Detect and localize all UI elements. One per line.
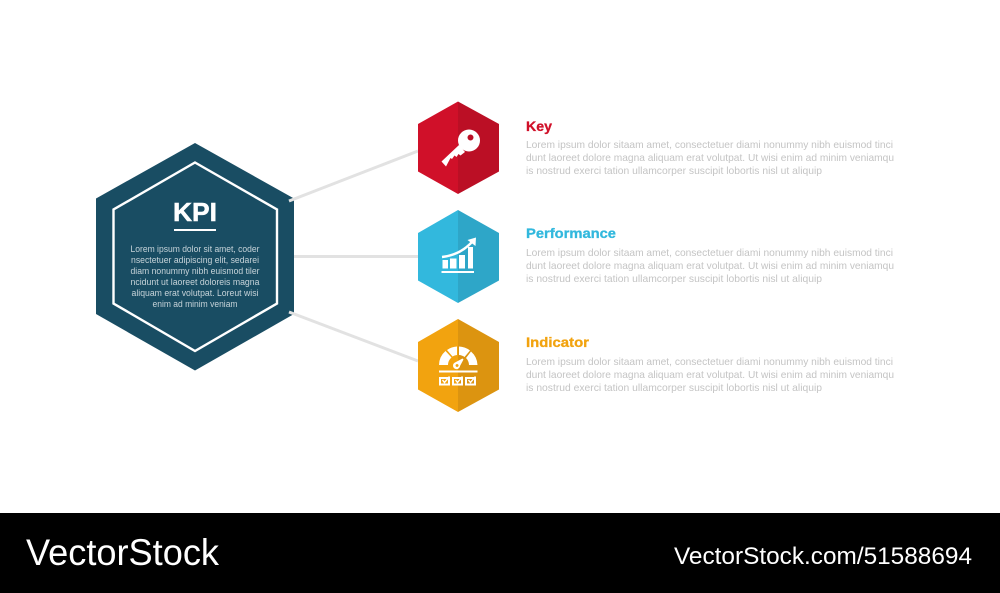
- KPI description text: aliquam erat volutpat. Loreut wisi: [132, 288, 259, 298]
- footer bar: [0, 513, 1000, 593]
- panel: KPI hexagon: [96, 143, 294, 370]
- text block: Performance: dunt laoreet dolore magna aliquam erat volutpat. Ut wisi enim ad minim veniamqu: [526, 260, 894, 272]
- text block: Indicator: is nostrud exerci tation ullamcorper suscipit lobortis nisl ut aliquip: [526, 382, 822, 394]
- text block: Key: [526, 118, 894, 177]
- brand name: VectorStock: [26, 532, 219, 573]
- icon: gauge with checkboxes: [439, 346, 478, 372]
- heading: KPI: KPI: [173, 197, 217, 227]
- text block: Key: dunt laoreet dolore magna aliquam erat volutpat. Ut wisi enim ad minim veniamqu: [526, 152, 894, 164]
- text block: Key: Lorem ipsum dolor sitaam amet, consectetuer diami nonummy nibh euismod tinci: [526, 139, 893, 151]
- icon hexagon: Performance: [418, 210, 499, 303]
- text block: Indicator: dunt laoreet dolore magna aliquam erat volutpat. Ut wisi enim ad minim veniamqu: [526, 369, 894, 381]
- KPI description text: [130, 244, 260, 309]
- text block: Performance: Lorem ipsum dolor sitaam amet, consectetuer diami nonummy nibh euismod tinci: [526, 247, 893, 259]
- KPI description text: ncidunt ut laoreet doloreis magna: [130, 277, 260, 287]
- text block: Indicator: [526, 334, 894, 394]
- KPI description text: Lorem ipsum dolor sit amet, coder: [130, 244, 260, 254]
- icon: key: [442, 130, 480, 166]
- text block: Indicator: Lorem ipsum dolor sitaam amet, consectetuer diami nonummy nibh euismod tinci: [526, 356, 893, 368]
- text block: Performance: is nostrud exerci tation ullamcorper suscipit lobortis nisl ut aliquip: [526, 273, 822, 285]
- icon: growth chart: [442, 238, 476, 273]
- heading: Indicator: Indicator: [526, 334, 590, 350]
- KPI description text: nsectetuer adipiscing elit, sedarei: [131, 255, 259, 265]
- KPI description text: enim ad minim veniam: [152, 299, 238, 309]
- text block: Key: is nostrud exerci tation ullamcorper suscipit lobortis nisl ut aliquip: [526, 165, 822, 177]
- image reference: VectorStock.com/51588694: [674, 543, 972, 570]
- icon hexagon: Key: [418, 102, 499, 194]
- heading underline: [174, 229, 216, 231]
- icon hexagon: Indicator: [418, 319, 499, 412]
- heading: Key: Key: [526, 118, 552, 134]
- connector lines: [289, 151, 418, 361]
- heading: Performance: Performance: [526, 225, 616, 241]
- text block: Performance: [526, 225, 894, 285]
- KPI description text: diam nonummy nibh euismod tiler: [130, 266, 260, 276]
